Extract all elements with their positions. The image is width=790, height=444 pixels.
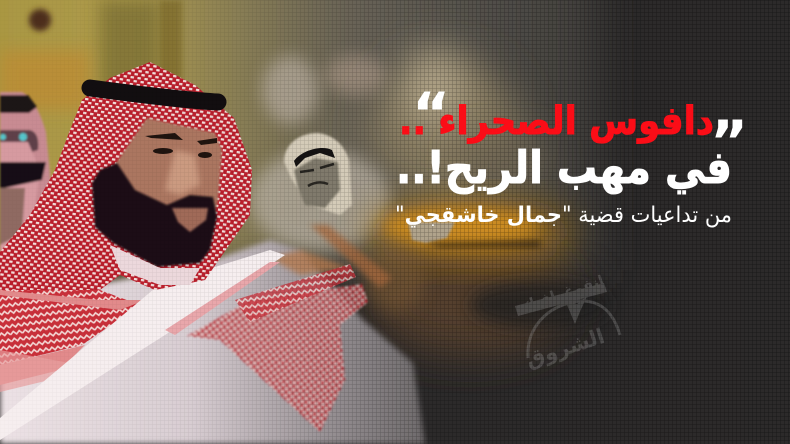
face bbox=[100, 118, 222, 250]
title line 2: white: في مهب الريح!.. bbox=[396, 141, 732, 194]
beard bbox=[92, 163, 217, 267]
left chest zigzag fabric bbox=[0, 290, 140, 365]
khashoggi portrait bbox=[284, 133, 352, 215]
watermark: infographic el shorouk logo bbox=[515, 272, 620, 372]
orange patch on shoulder bbox=[270, 250, 350, 275]
watermark: infographic el shorouk logo: إنفوغرافيك bbox=[519, 272, 606, 315]
rock on the sand bbox=[408, 222, 455, 243]
eyes and brows bbox=[145, 133, 217, 158]
background figures at far left bbox=[0, 92, 52, 262]
subtitle: من تداعيات قضية "جمال خاشقجي" bbox=[395, 203, 732, 228]
opening quote mark: “ bbox=[412, 80, 450, 148]
white robe and shoulders bbox=[0, 240, 425, 444]
white sash bbox=[0, 250, 285, 440]
head cloth bbox=[0, 62, 252, 290]
right shoulder check fabric bbox=[187, 284, 368, 432]
nose and cheek highlight bbox=[165, 150, 200, 195]
title line 1: red with quotation marks bbox=[399, 80, 748, 176]
closing quote mark: ” bbox=[710, 108, 748, 176]
neck collar bbox=[110, 245, 200, 285]
dark shadow under the rock bbox=[426, 240, 540, 248]
diagonal orange sleeve stripe behind shoulder bbox=[310, 225, 392, 288]
watermark: infographic el shorouk logo: الشروق bbox=[523, 324, 608, 372]
right shoulder zigzag edge bbox=[235, 264, 356, 322]
pink stripes bbox=[0, 290, 145, 385]
background: smoke and orange desert glow bbox=[250, 50, 570, 355]
dark horizon shade behind logo bbox=[470, 281, 610, 329]
main figure bbox=[0, 62, 425, 444]
agal headband bbox=[90, 88, 218, 102]
title line 1: red with quotation marks: دافوس الصحراء .. bbox=[399, 99, 714, 144]
lips and chin bbox=[172, 208, 208, 232]
